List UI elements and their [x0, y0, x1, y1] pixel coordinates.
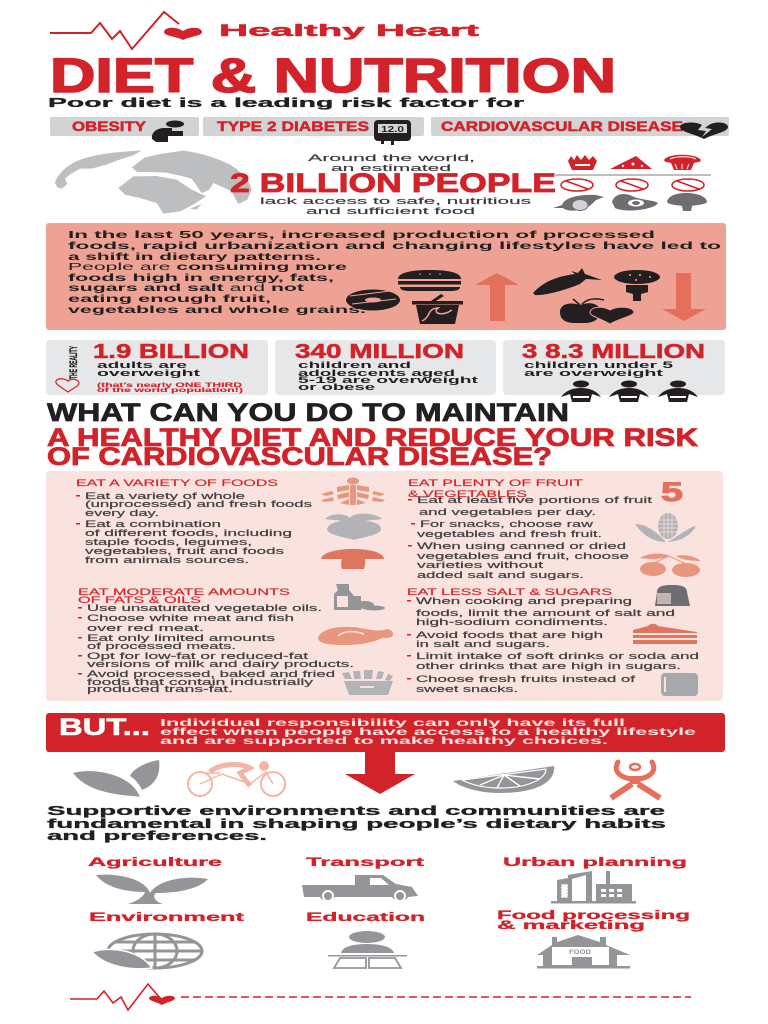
text: eat plenty of fruit and vegetables: & VEGETABLES — [408, 488, 527, 499]
title: DIET & NUTRITION — [50, 50, 616, 103]
text: eat moderate amounts of fats and oils: versions of milk and dairy products. — [87, 658, 354, 669]
icon: orange slice — [453, 766, 554, 793]
sector: transport: Transport — [306, 857, 424, 869]
text: eat a variety of foods: Eat a variety of whole — [85, 490, 245, 501]
panel: shift in dietary patterns: People are consuming more — [68, 262, 348, 273]
stat: 1.9 billion adults: 1.9 BILLION — [93, 341, 249, 363]
icon: cake — [633, 624, 697, 644]
text: eat moderate amounts of fats and oils: OF FATS & OILS — [78, 594, 201, 605]
text: eat moderate amounts of fats and oils: foods that contain industrially — [87, 676, 314, 687]
stat: 1.9 billion adults — [46, 340, 268, 395]
stat: 340 million children: or obese — [298, 382, 375, 392]
text: eat less salt and sugars: Limit intake of soft drinks or soda and — [416, 650, 699, 661]
text: eat a variety of foods — [76, 477, 313, 565]
sector: food processing and marketing: & marketing — [497, 920, 645, 932]
risk factor: cardiovascular disease: CARDIOVASCULAR DISEASE — [441, 118, 683, 134]
sector: urban planning: Urban planning — [503, 857, 687, 869]
sector: environment: Environment — [89, 912, 244, 924]
stat: 38.3 million children under 5: children under 5 — [524, 360, 673, 370]
icon: carrot — [533, 268, 602, 295]
icon: mushroom — [321, 549, 384, 569]
risk factor: cardiovascular disease — [431, 117, 729, 139]
text: eat less salt and sugars: EAT LESS SALT & SUGARS — [407, 586, 612, 597]
icon: drink cup — [412, 294, 463, 324]
sector: food processing and marketing: FOOD — [569, 950, 592, 956]
heading: what can you do: A HEALTHY DIET AND REDUCE YOUR RISK — [47, 424, 698, 452]
icon: roast chicken — [318, 627, 393, 645]
sector: food processing and marketing — [497, 910, 690, 968]
arrow: down from banner — [345, 752, 415, 794]
icon: leaves — [73, 760, 159, 797]
text: eat a variety of foods: from animals sources. — [85, 554, 249, 565]
icon: fries — [342, 670, 393, 695]
stat: 38.3 million children under 5: 3 8.3 MILLION — [522, 341, 705, 363]
globe — [55, 151, 252, 214]
icon: turnip — [325, 514, 382, 540]
text: eat moderate amounts of fats and oils: Choose white meat and fish — [87, 612, 294, 623]
text: eat a variety of foods: staple foods, legumes, — [85, 536, 252, 547]
text: eat moderate amounts of fats and oils — [78, 586, 354, 694]
text: eat a variety of foods: vegetables, fruit and foods — [85, 545, 285, 556]
stat: 38.3 million children under 5 — [503, 340, 725, 402]
text: eat a variety of foods: EAT A VARIETY OF FOODS — [76, 477, 278, 488]
text: eat less salt and sugars: When cooking and preparing — [416, 595, 632, 606]
stat: 340 million children: 340 MILLION — [295, 341, 464, 363]
panel: shift in dietary patterns: eating enough fruit, — [68, 294, 271, 305]
icon: cyclist — [188, 761, 285, 796]
banner: but: BUT... — [59, 714, 150, 741]
statistic: 2 billion people: lack access to safe, nutritious — [260, 196, 531, 207]
banner: but: effect when people have access to a healthy lifestyle — [160, 727, 697, 738]
stat: 1.9 billion adults: overweight — [97, 368, 200, 378]
sector: agriculture — [88, 857, 222, 904]
heading: what can you do: OF CARDIOVASCULAR DISEASE? — [47, 443, 552, 471]
icon: burger — [398, 270, 461, 291]
icon: corn — [635, 513, 696, 542]
panel: shift in dietary patterns: vegetables and whole grains. — [68, 305, 366, 316]
text: eat less salt and sugars: Avoid foods that are high — [416, 629, 603, 640]
subtitle: Poor diet is a leading risk factor for — [48, 96, 524, 110]
text: eat a variety of foods: of different foods, including — [85, 527, 292, 538]
text: eat plenty of fruit and vegetables: and vegetables per day. — [419, 506, 596, 517]
icon: apple and heart — [560, 299, 634, 324]
icon: oil bottle and olives — [334, 584, 385, 610]
text: eat plenty of fruit and vegetables: vegetables and fruit, choose — [417, 550, 629, 561]
text: eat less salt and sugars: Choose fresh fruits instead of — [416, 673, 636, 684]
text: eat moderate amounts of fats and oils: Use unsaturated vegetable oils. — [87, 602, 322, 613]
stat: 38.3 million children under 5: are overweight — [524, 368, 663, 378]
panel: shift in dietary patterns: foods high in energy, fats, — [68, 273, 334, 284]
text: eat plenty of fruit and vegetables: varieties without — [417, 559, 544, 570]
text: supportive environments: and preferences. — [47, 829, 267, 843]
heading: what can you do: WHAT CAN YOU DO TO MAINTAIN — [47, 399, 569, 427]
text: eat plenty of fruit and vegetables — [408, 477, 653, 580]
stat: 340 million children — [275, 340, 496, 395]
panel: shift in dietary patterns: In the last 50 years, increased production of processed — [68, 230, 655, 241]
text: eat moderate amounts of fats and oils: Opt for low-fat or reduced-fat — [87, 650, 309, 661]
text: eat less salt and sugars: foods, limit the amount of salt and — [416, 607, 675, 618]
icon: salt shaker — [655, 585, 690, 606]
text: supportive environments: fundamental in shaping people’s dietary habits — [47, 817, 666, 831]
logo: heartbeat and heart — [50, 12, 202, 49]
text: eat a variety of foods: every day. — [85, 507, 159, 518]
arrow: fewer healthy foods — [662, 273, 706, 321]
text: eat less salt and sugars: in salt and sugars. — [416, 638, 550, 649]
text: eat plenty of fruit and vegetables: When using canned or dried — [417, 540, 626, 551]
icon: cherries — [640, 554, 701, 577]
text: eat a variety of foods: (unprocessed) and fresh foods — [85, 498, 313, 509]
sector: agriculture: Agriculture — [88, 857, 222, 869]
icon: active person — [611, 762, 660, 798]
text: eat plenty of fruit and vegetables: EAT PLENTY OF FRUIT — [408, 477, 583, 488]
stat: 340 million children: 5-19 are overweight — [298, 375, 478, 385]
stat: 1.9 billion adults: THE REALITY — [68, 346, 80, 379]
panel: shift in dietary patterns: sugars and salt and not — [68, 283, 305, 294]
text: eat moderate amounts of fats and oils: over red meat. — [87, 622, 204, 633]
risk factor: type 2 diabetes: 12.0 — [381, 125, 405, 134]
unhealthy food icons — [568, 155, 701, 170]
text: eat moderate amounts of fats and oils: Eat only limited amounts — [87, 632, 276, 643]
sector: environment — [89, 912, 244, 969]
text: eat moderate amounts of fats and oils: produced trans-fat. — [87, 683, 233, 694]
statistic: 2 billion people: and sufficient food — [306, 206, 475, 217]
statistic: 2 billion people: 2 BILLION PEOPLE — [230, 168, 556, 198]
sector: food processing and marketing: Food processing — [497, 910, 690, 922]
text: eat plenty of fruit and vegetables: vegetables and fresh fruit. — [417, 528, 602, 539]
text: eat less salt and sugars: high-sodium condiments. — [416, 616, 608, 627]
icon: donut — [346, 290, 400, 310]
icon: number five: 5 — [661, 477, 683, 507]
text: eat less salt and sugars — [407, 586, 699, 694]
text: eat moderate amounts of fats and oils: of processed meats. — [87, 640, 236, 651]
text: eat less salt and sugars: sweet snacks. — [416, 683, 518, 694]
risk factor: obesity: OBESITY — [72, 118, 147, 134]
icon: wheat — [321, 478, 385, 505]
icon: overweight children — [561, 380, 698, 402]
text: eat a variety of foods: Eat a combination — [85, 518, 221, 529]
stat: 340 million children: children and — [298, 360, 411, 370]
sector: transport — [302, 857, 424, 901]
divider and no signs — [555, 175, 711, 191]
banner: but — [46, 713, 725, 752]
text: eat less salt and sugars: other drinks that are high in sugars. — [416, 660, 681, 671]
panel: shift in dietary patterns — [46, 223, 726, 330]
text: supportive environments: Supportive environments and communities are — [47, 804, 665, 818]
stat: 1.9 billion adults: adults are — [97, 360, 187, 370]
banner: but: and are supported to make healthy choices. — [160, 736, 608, 747]
statistic: 2 billion people: Around the world, — [308, 153, 475, 164]
risk factor: type 2 diabetes: TYPE 2 DIABETES — [217, 118, 369, 134]
banner: but: Individual responsibility can only have its full — [160, 718, 625, 729]
stat: 340 million children: adolescents aged — [298, 368, 455, 378]
statistic: 2 billion people — [230, 153, 556, 217]
panel: shift in dietary patterns: a shift in dietary patterns. — [68, 252, 321, 263]
text: supportive environments — [47, 804, 666, 843]
brand name: Healthy Heart — [219, 21, 480, 40]
stat: 1.9 billion adults: (that’s nearly ONE THIRD — [97, 382, 243, 389]
footer: heartbeat and dashed line — [70, 984, 691, 1010]
icon: strawberry on fork — [614, 270, 660, 301]
sector: education — [306, 912, 425, 968]
text: eat plenty of fruit and vegetables: For snacks, choose raw — [420, 518, 593, 529]
healthy food icons — [553, 193, 707, 211]
text: eat plenty of fruit and vegetables: added salt and sugars. — [417, 569, 584, 580]
icon: jar — [661, 673, 698, 696]
arrow: more unhealthy foods — [475, 273, 519, 321]
panel: recommendations — [46, 471, 723, 701]
text: eat plenty of fruit and vegetables: Eat at least five portions of fruit — [417, 494, 653, 505]
risk factor: type 2 diabetes — [203, 117, 424, 145]
risk factor: obesity — [50, 117, 199, 142]
stat: 1.9 billion adults: of the world population!) — [97, 387, 243, 394]
heading: what can you do — [47, 399, 698, 471]
text: eat moderate amounts of fats and oils: Avoid processed, baked and fried — [87, 668, 335, 679]
panel: shift in dietary patterns: foods, rapid urbanization and changing lifestyles have led to — [68, 241, 721, 252]
text: eat moderate amounts of fats and oils: EAT MODERATE AMOUNTS — [78, 586, 290, 597]
statistic: 2 billion people: an estimated — [331, 163, 451, 174]
sector: urban planning — [503, 857, 687, 904]
sector: education: Education — [306, 912, 425, 924]
